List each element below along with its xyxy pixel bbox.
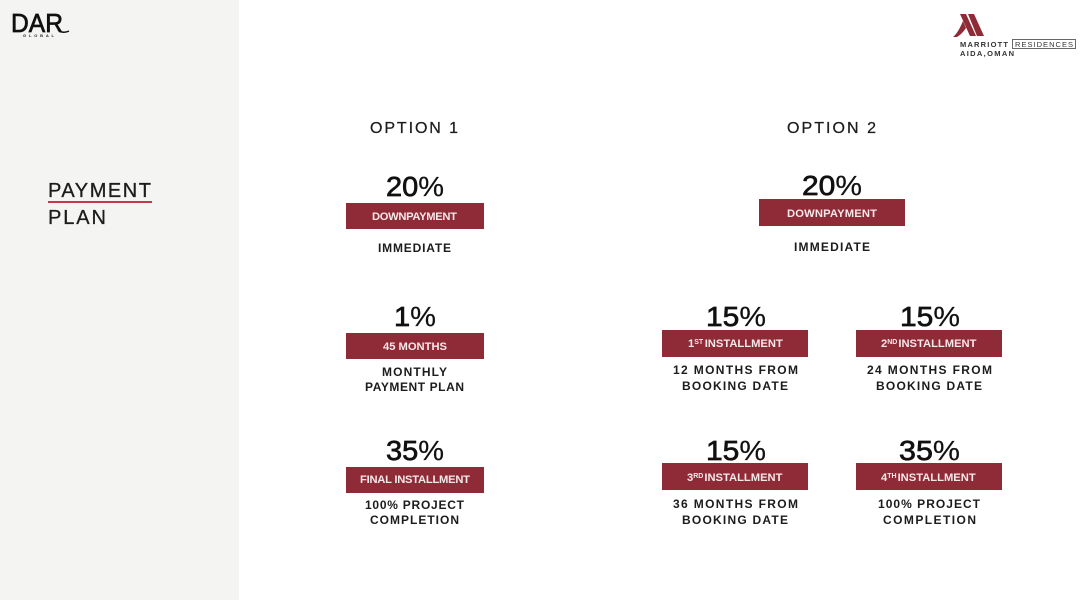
option 1: monthly plan: PAYMENT PLAN (365, 380, 464, 394)
logo: Marriott Residences Aida Oman: MARRIOTT (960, 40, 1008, 49)
heading: payment plan: PLAN (48, 207, 106, 229)
option 2: 4th installment: 100% PROJECT (878, 497, 981, 511)
logo: Dar Global: GLOBAL (23, 33, 55, 38)
option 2: 1st installment (662, 301, 808, 393)
option 2: downpayment: IMMEDIATE (794, 240, 870, 254)
option 2: 3rd installment: 36 MONTHS FROM (673, 497, 798, 511)
option 2: downpayment: DOWNPAYMENT (787, 208, 877, 220)
option 2: 2nd installment (856, 301, 1002, 393)
left sidebar panel (0, 0, 239, 600)
option 2: 4th installment: TH (887, 473, 897, 480)
option 2: 1st installment: BOOKING DATE (682, 379, 788, 393)
option 2: downpayment: 20% (802, 170, 862, 201)
option 1: final installment: COMPLETION (370, 513, 459, 527)
option 2: 3rd installment: INSTALLMENT (704, 472, 783, 484)
logo: Marriott Residences Aida Oman: RESIDENCES (1015, 40, 1073, 49)
option 1: downpayment: 20% (386, 171, 444, 202)
option 2: 1st installment: ST (694, 339, 704, 346)
option 2: 2nd installment: BOOKING DATE (876, 379, 982, 393)
option 1: downpayment: DOWNPAYMENT (372, 211, 457, 223)
option 2: downpayment (759, 170, 905, 254)
option 2: 3rd installment: RD (693, 473, 703, 480)
option 1: monthly plan: MONTHLY (382, 365, 447, 379)
option 1: monthly plan (346, 301, 484, 394)
option 2: 2nd installment: 2 (881, 338, 887, 350)
option 1: monthly plan: 45 MONTHS (383, 341, 448, 353)
option 2: 4th installment: 35% (899, 435, 960, 466)
option 1: downpayment (346, 171, 484, 255)
heading: payment plan: PAYMENT (48, 180, 151, 202)
option 2: 4th installment: 4 (881, 472, 887, 484)
heading: payment plan (48, 180, 152, 229)
logo: Dar Global: DAR (11, 8, 63, 38)
option 2: 4th installment (856, 435, 1002, 527)
option 2: 3rd installment: 15% (706, 435, 766, 466)
option 2: 1st installment: 1 (688, 338, 694, 350)
option 2: 2nd installment: 15% (900, 301, 960, 332)
option 2: 3rd installment (662, 435, 808, 527)
option 2: 2nd installment: 24 MONTHS FROM (867, 363, 992, 377)
option 2: 2nd installment: INSTALLMENT (898, 338, 977, 350)
option 2: 3rd installment: BOOKING DATE (682, 513, 788, 527)
option 2: 1st installment: INSTALLMENT (705, 338, 783, 350)
option 1: final installment (346, 435, 484, 527)
option 2: 4th installment: COMPLETION (883, 513, 976, 527)
heading: option 2: OPTION 2 (787, 120, 876, 137)
option 2: 1st installment: 12 MONTHS FROM (673, 363, 798, 377)
option 1: downpayment: IMMEDIATE (378, 241, 451, 255)
option 2: 1st installment: 15% (706, 301, 766, 332)
option 1: final installment: FINAL INSTALLMENT (360, 474, 470, 486)
heading: option 1: OPTION 1 (370, 120, 458, 137)
option 2: 3rd installment: 3 (687, 472, 693, 484)
logo: Marriott Residences Aida Oman: AIDA,OMAN (960, 49, 1014, 58)
option 1: final installment: 100% PROJECT (365, 498, 465, 512)
option 2: 4th installment: INSTALLMENT (898, 472, 976, 484)
option 2: 2nd installment: ND (887, 339, 897, 346)
option 1: final installment: 35% (386, 435, 444, 466)
logo: Marriott Residences Aida Oman (953, 14, 1076, 58)
option 1: monthly plan: 1% (394, 301, 436, 332)
